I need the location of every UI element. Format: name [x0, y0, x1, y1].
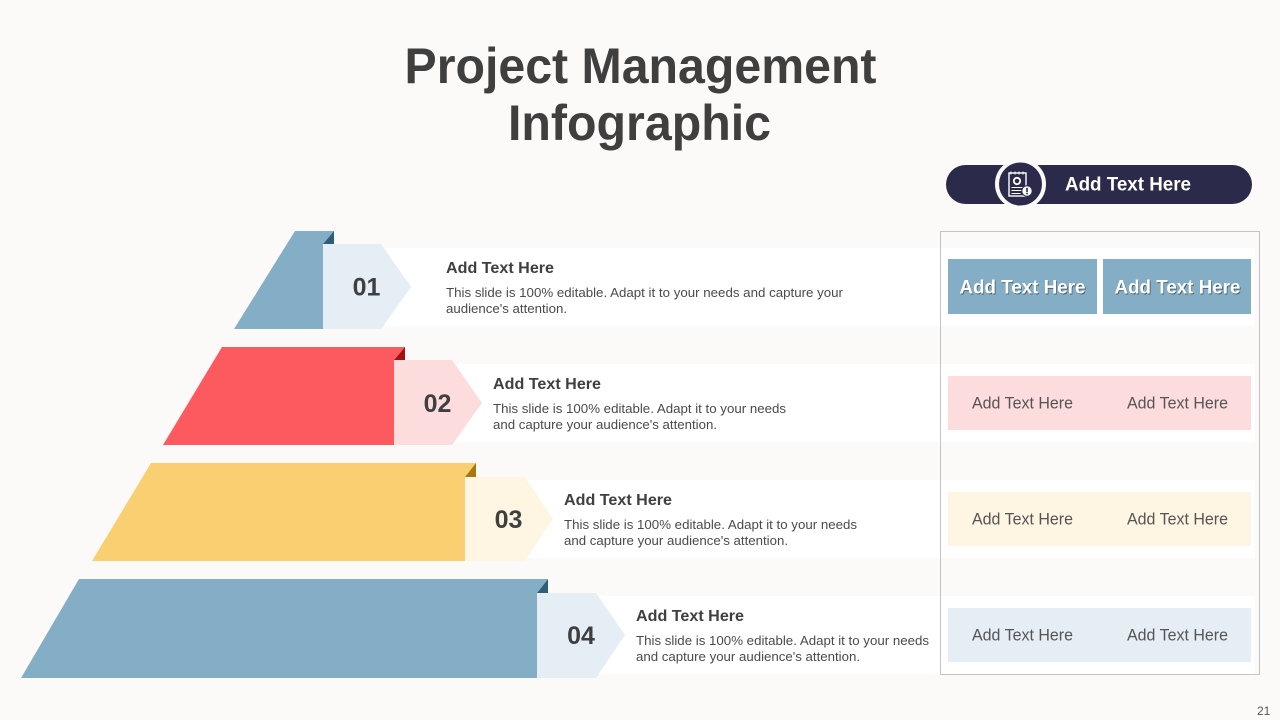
table header cell 2: Add Text Here [1115, 278, 1241, 299]
row 1 text: Add Text Here [446, 260, 554, 277]
header pill: Add Text Here [1065, 174, 1191, 196]
header pill [946, 160, 1252, 208]
pyramid tier 2 [163, 347, 482, 445]
table row: yellow [948, 492, 1251, 546]
row 4 text: and capture your audience's attention. [636, 649, 860, 664]
pyramid tier 4 [21, 579, 625, 678]
table row: red: Add Text Here [1127, 394, 1228, 412]
page number: 21 [1257, 704, 1271, 718]
arrow tag 03: 03 [495, 506, 522, 534]
row 4 text: This slide is 100% editable. Adapt it to your needs [636, 633, 929, 648]
row 2 text: Add Text Here [493, 376, 601, 393]
arrow tag 02: 02 [424, 390, 451, 418]
icon: document with gear and alert [997, 160, 1044, 208]
table header cell 1: Add Text Here [960, 278, 1086, 298]
table row: blue: Add Text Here [972, 626, 1073, 644]
arrow tag 02 [394, 360, 482, 445]
row 4 text: Add Text Here [636, 608, 744, 625]
table row: blue: Add Text Here [1127, 626, 1228, 644]
row 1 text: This slide is 100% editable. Adapt it to your needs and capture your [446, 285, 844, 300]
row 3 text [564, 492, 857, 548]
row 2 text [493, 376, 786, 432]
pyramid tier 1 [234, 231, 411, 329]
table row: yellow: Add Text Here [1127, 510, 1228, 528]
row 1 text [446, 260, 844, 316]
row 1 band [385, 248, 1255, 326]
row 4 band [598, 596, 1255, 674]
row 3 text: Add Text Here [564, 492, 672, 509]
arrow tag 03 [465, 477, 553, 561]
table header cell 2 [1103, 259, 1251, 314]
title [404, 38, 877, 151]
arrow tag 04: 04 [567, 622, 595, 650]
arrow tag 01 [323, 244, 411, 329]
row 3 text: This slide is 100% editable. Adapt it to your needs [564, 517, 857, 532]
row 2 text: and capture your audience's attention. [493, 417, 717, 432]
table outline [940, 232, 1260, 674]
row 3 text: and capture your audience's attention. [564, 533, 788, 548]
arrow tag 04 [537, 593, 625, 678]
title: Infographic [508, 95, 771, 151]
table row: blue [948, 608, 1251, 662]
table row: red: Add Text Here [972, 394, 1073, 412]
table row: yellow: Add Text Here [972, 510, 1073, 528]
title: Project Management [404, 38, 877, 94]
table header cell 1: Add Text Here [960, 278, 1086, 299]
table header cell 2: Add Text Here [1114, 278, 1240, 298]
row 3 band [527, 480, 1255, 558]
row 4 text [636, 608, 929, 664]
row 2 band [455, 364, 1255, 442]
table header cell 1 [948, 259, 1097, 314]
row 1 text: audience's attention. [446, 301, 567, 316]
table row: red [948, 376, 1251, 430]
row 2 text: This slide is 100% editable. Adapt it to your needs [493, 401, 786, 416]
arrow tag 01: 01 [353, 274, 380, 302]
pyramid tier 3 [92, 463, 553, 561]
